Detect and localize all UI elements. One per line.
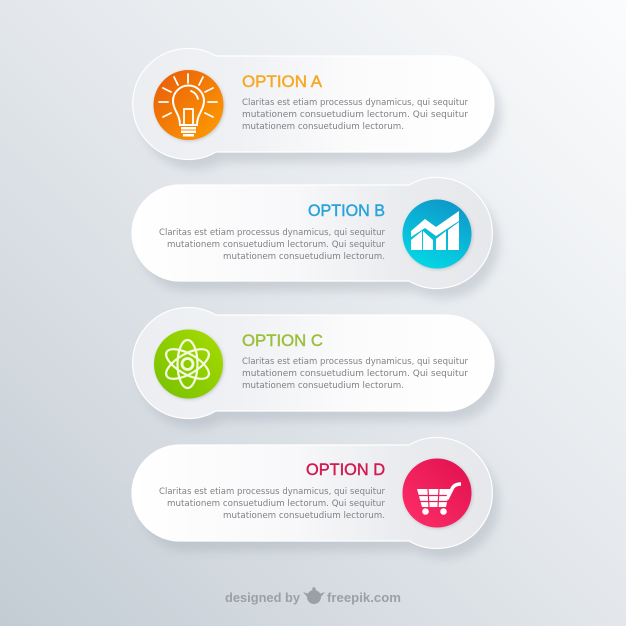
text block: Claritas est etiam processus dynamicus, qui sequitur <box>242 357 468 367</box>
panel: option C <box>133 308 501 428</box>
text block <box>159 228 385 262</box>
icon: shopping cart <box>402 458 472 528</box>
text block: mutationem consuetudium lectorum. Qui sequitur <box>167 240 385 250</box>
panel: option D <box>132 438 499 558</box>
panel A shape <box>133 49 494 160</box>
footer credit: designed by <box>225 590 301 605</box>
panel B shape <box>132 178 492 288</box>
text block: mutationem consuetudium lectorum. <box>223 511 385 521</box>
text block: Claritas est etiam processus dynamicus, qui sequitur <box>159 228 385 238</box>
text block: mutationem consuetudium lectorum. Qui sequitur <box>242 110 468 120</box>
panel C shape <box>133 308 494 418</box>
text block: mutationem consuetudium lectorum. <box>242 381 404 391</box>
panel A shadow <box>140 59 501 170</box>
text block <box>242 357 468 391</box>
panel: option A <box>133 49 501 170</box>
text block: mutationem consuetudium lectorum. <box>223 252 385 262</box>
panel B shadow <box>139 188 499 298</box>
footer credit: freepik.com <box>327 590 401 605</box>
heading: OPTION A <box>242 72 323 91</box>
footer credit <box>225 587 401 605</box>
text block: mutationem consuetudium lectorum. <box>242 122 404 132</box>
panel C shadow <box>140 318 501 428</box>
panel D shadow <box>139 448 499 558</box>
panel D shape <box>132 438 492 548</box>
text block: Claritas est etiam processus dynamicus, qui sequitur <box>159 487 385 497</box>
icon: atom <box>154 330 224 400</box>
text block: mutationem consuetudium lectorum. Qui sequitur <box>242 369 468 379</box>
text block: Claritas est etiam processus dynamicus, qui sequitur <box>242 98 468 108</box>
text block <box>242 98 468 132</box>
heading: OPTION B <box>308 201 385 220</box>
heading: OPTION D <box>306 460 385 479</box>
text block <box>159 487 385 521</box>
text block: mutationem consuetudium lectorum. Qui sequitur <box>167 499 385 509</box>
panel: option B <box>132 178 499 298</box>
heading: OPTION C <box>242 331 323 350</box>
icon: light bulb <box>154 70 224 141</box>
icon: freepik mascot <box>303 587 325 604</box>
icon: bar chart <box>402 200 472 270</box>
